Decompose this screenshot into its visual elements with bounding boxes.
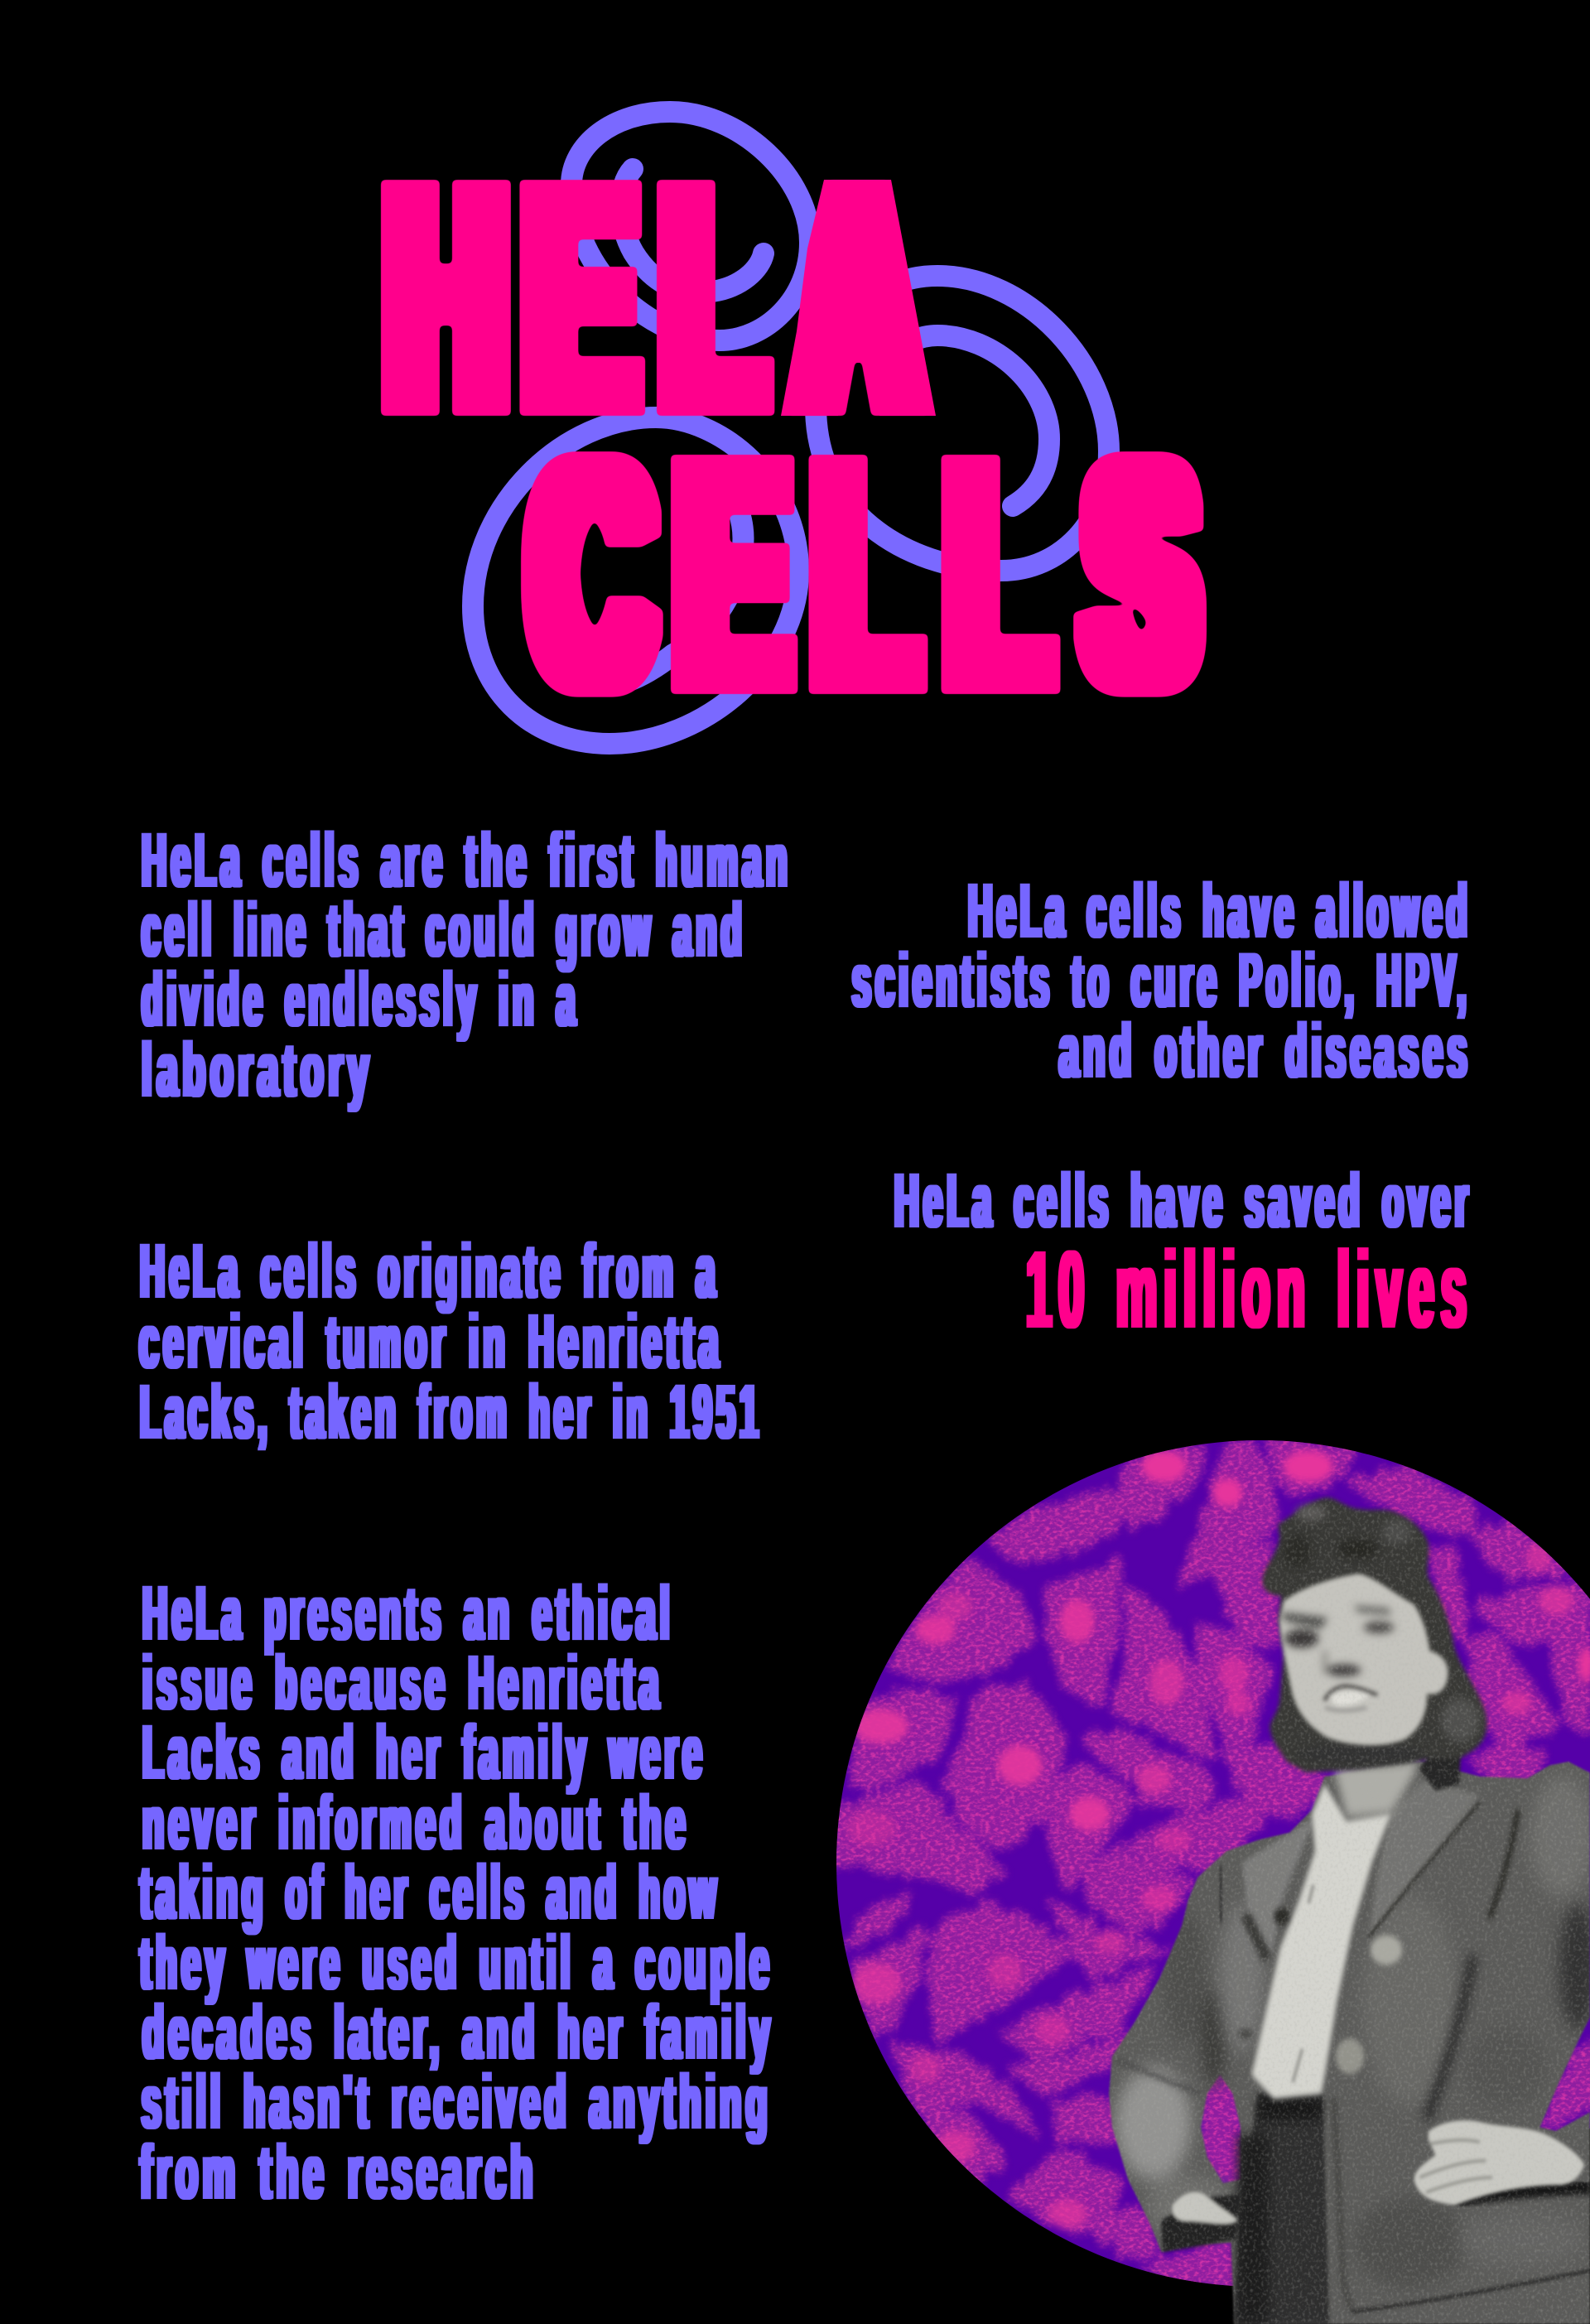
left cuff and fist [1161,2192,1241,2252]
mouth [1324,1686,1377,1710]
text: HeLa cells are the first human [142,818,792,903]
jacket shading [1115,1777,1590,2312]
text block: lives saved [894,1159,1473,1350]
left eye [1282,1613,1327,1648]
head [1262,1497,1487,1772]
buttons [1238,1907,1402,2074]
text: they were used until a couple [140,1921,773,2005]
skirt shadows [1237,2097,1322,2324]
hair [1262,1497,1487,1772]
text: still hasn't received anything [142,2060,772,2144]
text block: ethical issue: issue because Henrietta [142,1641,663,1725]
skirt [1234,2094,1329,2324]
blouse creases [1293,1885,1313,2082]
face [1279,1574,1448,1745]
text block: first human cell line: divide endlessly in a [142,957,580,1042]
cell nuclei [846,1450,1590,2229]
text block: ethical issue [140,1571,774,2215]
face features [1282,1605,1394,1710]
text block: ethical issue: HeLa presents an ethical [142,1571,674,1656]
circle of HeLa cells [828,1433,1590,2294]
title line: CELLS: CELLS [532,401,1195,748]
text block: ethical issue: never informed about the [142,1781,690,1865]
chin shadow [1298,1743,1424,1766]
icon: right cell spiral [816,276,1109,571]
right eye [1354,1605,1394,1633]
hand on right hip [1414,2120,1584,2206]
text block: first human cell line [142,818,792,1112]
icon: top cell spiral [571,112,810,340]
cell bodies [831,1437,1590,2290]
title line: HELA: HELA [388,127,916,468]
right lapel [1369,1781,1480,1937]
jacket [1109,1762,1590,2324]
photo: Henrietta Lacks [1109,1497,1590,2324]
text: taking of her cells and how [140,1850,720,1935]
hair end at shoulder [1419,1739,1461,1791]
text block: first human cell line: laboratory [142,1028,373,1112]
nose [1325,1651,1361,1676]
text block: ethical issue: Lacks and her family were [142,1710,706,1795]
left lapel [1242,1818,1315,1960]
text: cell line that could grow and [142,888,746,972]
blouse [1251,1784,1391,2100]
text block: cures [852,869,1472,1093]
text: cervical tumor in Henrietta [139,1299,723,1384]
text: decades later, and her family [142,1990,774,2075]
neck [1334,1747,1423,1818]
text block: ethical issue: from the research [140,2130,537,2215]
text block: origin [139,1229,763,1454]
text: HeLa cells originate from a [140,1229,720,1314]
decorative cell spirals [473,112,1109,744]
text: Lacks, taken from her in 1951 [140,1370,763,1454]
body [1109,1739,1590,2324]
icon: lower left cell spiral [473,417,798,744]
hair curls [1284,1505,1480,1742]
title [388,127,1195,748]
